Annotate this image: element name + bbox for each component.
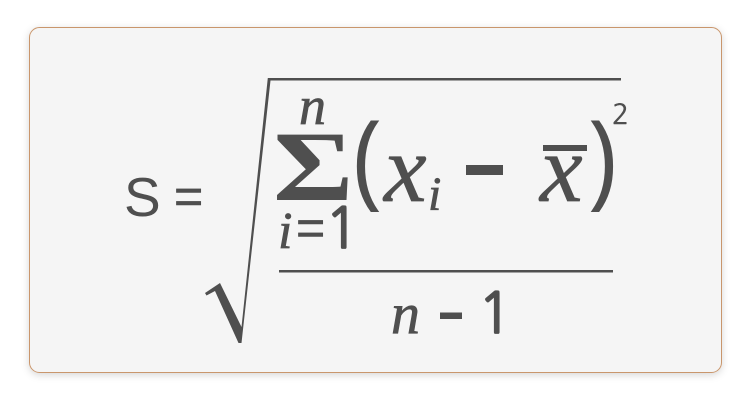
right parenthesis: )	[592, 105, 617, 212]
subscript i: i	[428, 168, 441, 221]
overbar	[543, 145, 587, 151]
denominator n: n	[391, 281, 420, 346]
exponent 2: 2	[612, 101, 629, 129]
summation sign: Σ	[273, 112, 353, 222]
denominator 1: 1	[478, 286, 512, 342]
summation upper limit: n	[299, 76, 326, 136]
term x i: x	[382, 115, 427, 222]
minus sign	[466, 165, 503, 175]
fraction bar	[279, 270, 613, 272]
index i: i	[278, 203, 292, 260]
term x bar: x	[538, 115, 583, 222]
label: S: S	[124, 166, 161, 228]
equals: =	[296, 200, 325, 256]
equals sign: =	[174, 168, 203, 224]
one: 1	[325, 201, 359, 257]
summation lower limit	[278, 200, 359, 260]
panel: formula card	[30, 28, 722, 372]
denominator minus	[440, 312, 462, 319]
left parenthesis: (	[353, 105, 378, 212]
radical sign	[205, 78, 621, 343]
formula: sample standard deviation	[124, 76, 629, 346]
